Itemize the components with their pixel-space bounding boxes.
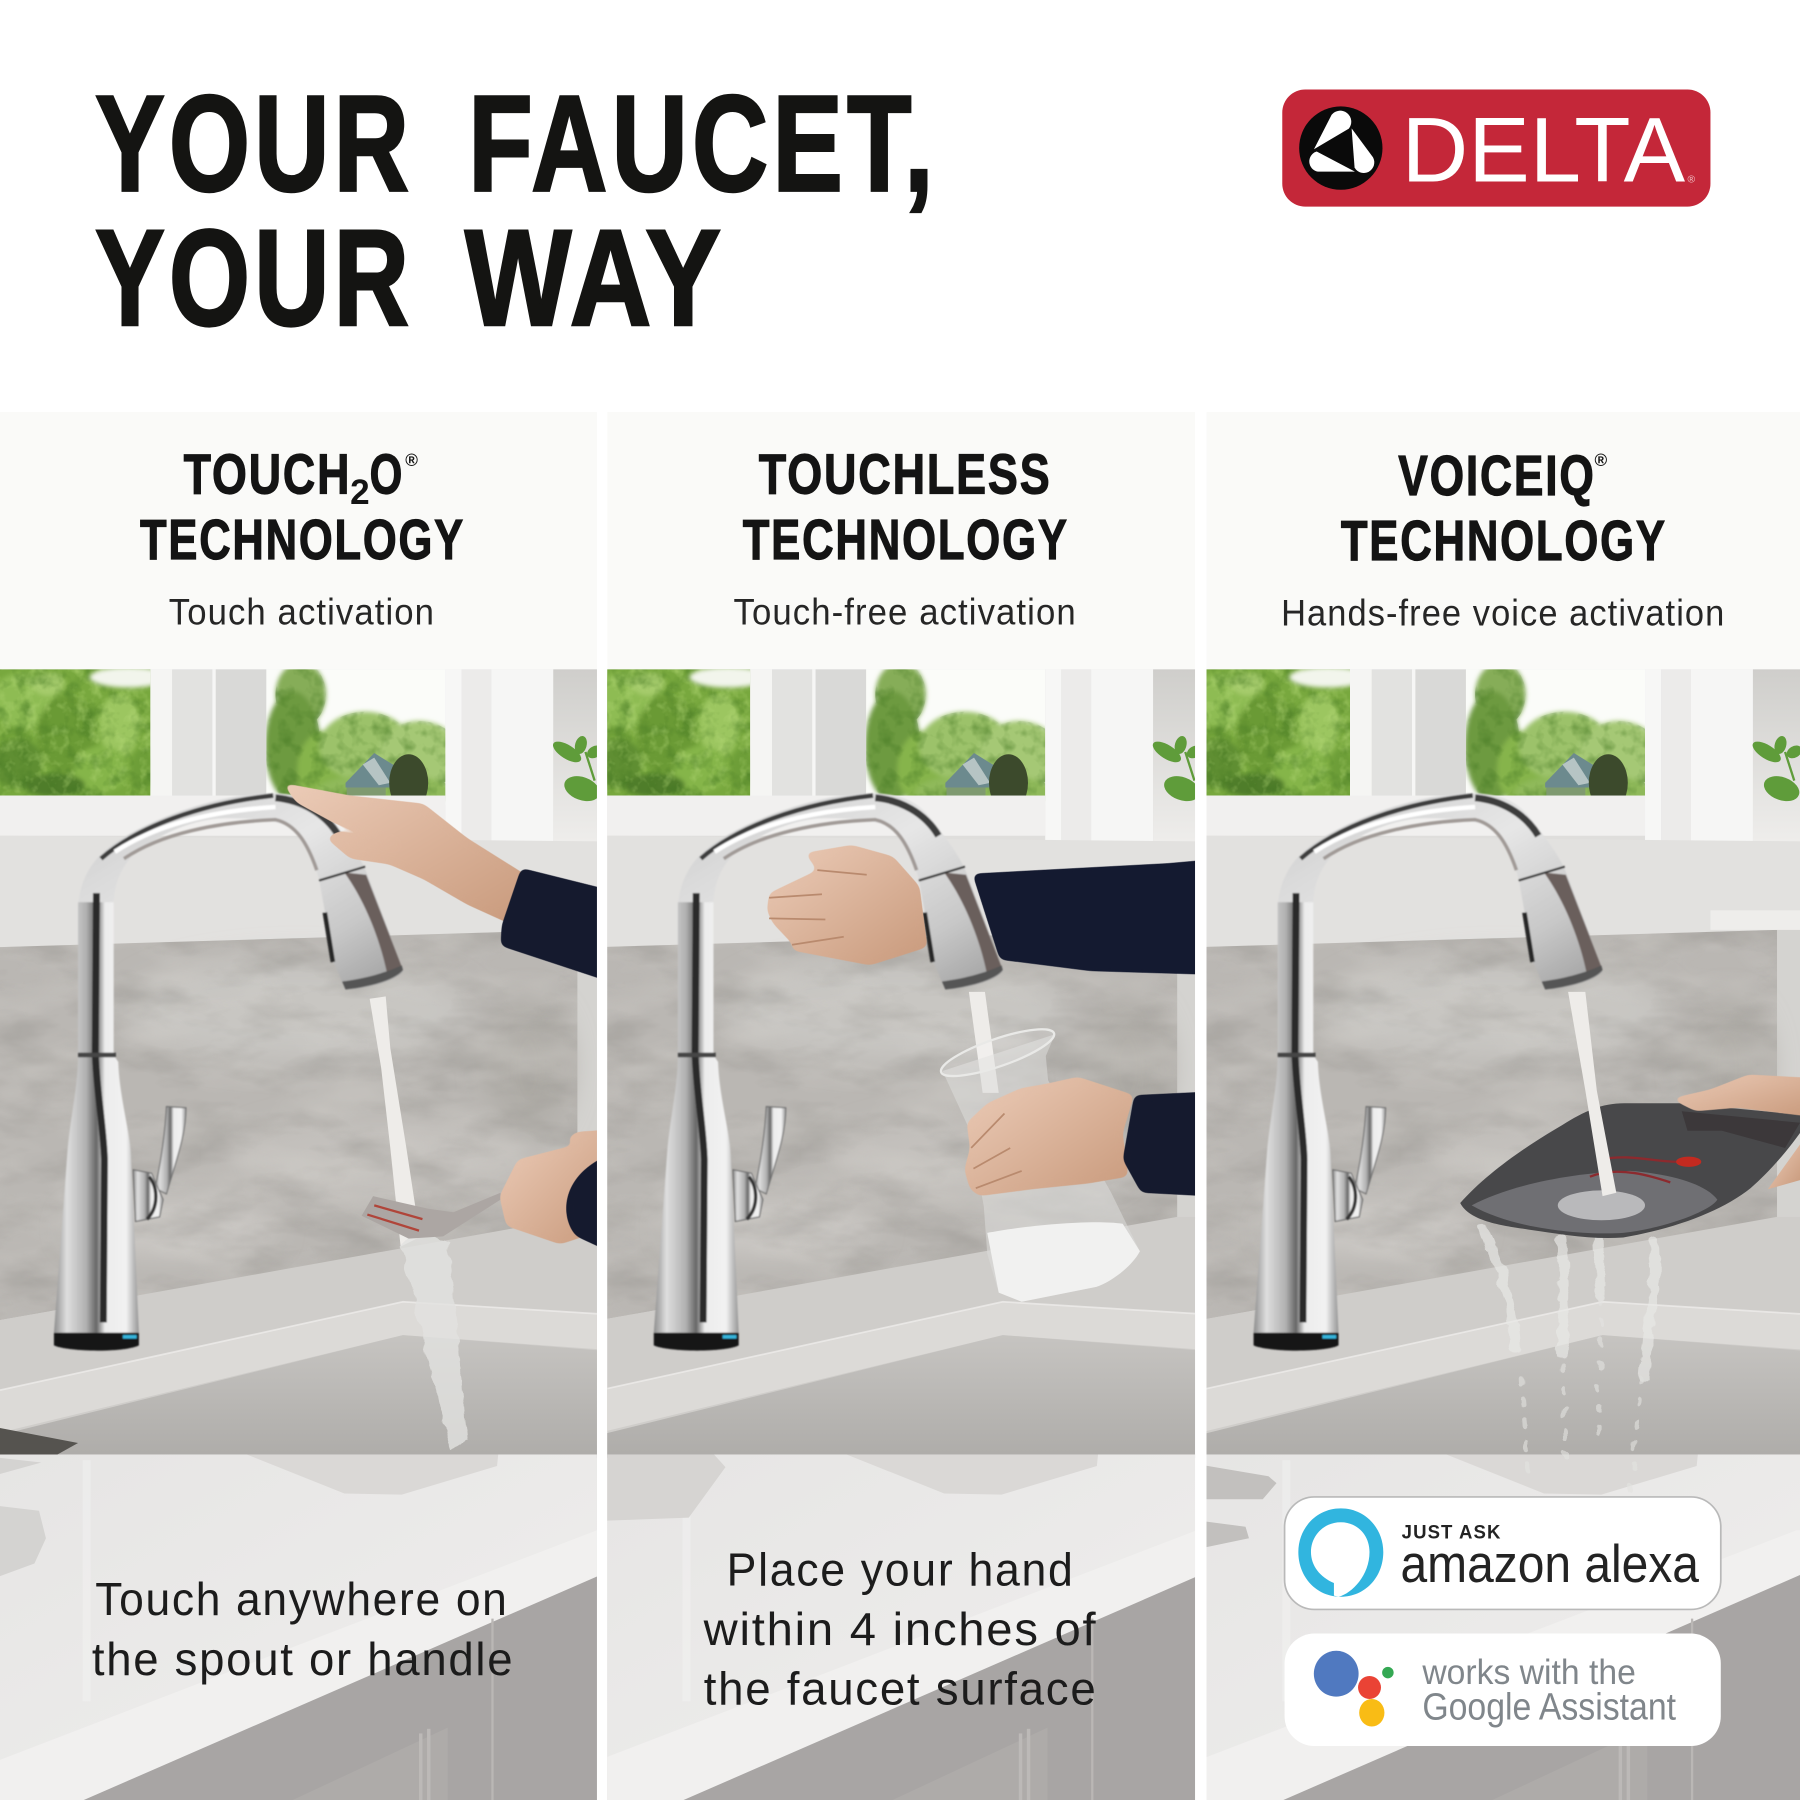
badge: Amazon Alexa: JUST ASK	[1402, 1521, 1502, 1543]
fork	[362, 1193, 501, 1239]
logo: Delta: DELTA	[1402, 99, 1686, 201]
text: touchless instructions: within 4 inches of	[703, 1603, 1097, 1655]
open hand	[767, 845, 928, 965]
text: touchless instructions	[703, 1543, 1097, 1715]
holding hand	[1670, 1074, 1800, 1117]
lower hand	[1768, 1145, 1800, 1189]
heading: VoiceIQ technology: VOICEIQ	[1398, 444, 1596, 507]
heading: VoiceIQ technology: ®	[1595, 450, 1608, 470]
heading: Touch2O technology: O	[370, 443, 404, 506]
window ledge	[1710, 910, 1800, 930]
text: touch instructions: Touch anywhere on	[95, 1573, 509, 1625]
heading: Touchless technology	[743, 443, 1069, 571]
panel: touch photo	[0, 662, 608, 1800]
panel: VoiceIQ header	[1207, 412, 1800, 669]
badge: Amazon Alexa	[1285, 1497, 1721, 1609]
subtitle: Touch activation	[169, 591, 435, 632]
panel: Touchless header	[607, 412, 1195, 669]
icon: Google Assistant dots	[1314, 1651, 1394, 1727]
title: YOUR	[95, 201, 413, 354]
panel: voice photo	[1190, 662, 1800, 1800]
dish under overlay	[597, 1454, 726, 1521]
text: touch instructions: the spout or handle	[92, 1633, 514, 1685]
holding hand	[500, 1130, 597, 1244]
water stream	[969, 992, 999, 1093]
badge: Google Assistant: Google Assistant	[1422, 1687, 1676, 1729]
text: touchless instructions: Place your hand	[727, 1543, 1074, 1595]
plate	[1460, 1103, 1800, 1238]
holding hand	[964, 1077, 1134, 1196]
icon: Alexa ring	[1298, 1508, 1383, 1597]
text: touch instructions	[92, 1573, 514, 1685]
subtitle: Hands-free voice activation	[1281, 593, 1725, 634]
sleeve	[1123, 1092, 1196, 1196]
panel: touchless photo	[591, 662, 1208, 1800]
dishes under overlay	[1206, 1466, 1276, 1547]
sleeve	[566, 1160, 597, 1246]
heading: Touchless technology: TOUCHLESS	[759, 443, 1052, 506]
plate in sink	[0, 1428, 78, 1454]
badge: Google Assistant: works with the	[1421, 1652, 1636, 1692]
heading: Touch2O technology	[140, 443, 465, 571]
heading: Touch2O technology: TECHNOLOGY	[140, 508, 465, 571]
splashing drips	[1483, 1226, 1655, 1492]
title	[95, 67, 938, 354]
heading: VoiceIQ technology: TECHNOLOGY	[1341, 509, 1667, 572]
panel: Touch2O header	[0, 412, 597, 669]
carafe	[937, 1020, 1140, 1302]
badge: Amazon Alexa: amazon alexa	[1401, 1535, 1700, 1594]
water stream	[1568, 992, 1616, 1196]
touching hand	[282, 783, 526, 928]
logo: Delta: ®	[1688, 175, 1696, 186]
badge: Google Assistant	[1285, 1634, 1721, 1746]
heading: VoiceIQ technology	[1341, 444, 1667, 572]
water stream	[370, 996, 419, 1247]
logo: Delta	[1282, 90, 1710, 207]
water foam	[401, 1228, 467, 1451]
heading: Touch2O technology: TOUCH	[184, 443, 351, 506]
heading: Touch2O technology: 2	[350, 472, 370, 512]
sleeve	[972, 860, 1205, 975]
heading: Touchless technology: TECHNOLOGY	[743, 508, 1069, 571]
sleeve	[500, 869, 597, 978]
text: touchless instructions: the faucet surface	[704, 1663, 1097, 1715]
title: YOUR	[95, 67, 413, 220]
subtitle: Touch-free activation	[734, 591, 1077, 632]
dishes under overlay	[0, 1458, 46, 1576]
heading: Touch2O technology: ®	[405, 450, 418, 470]
title: WAY	[465, 201, 726, 354]
title: FAUCET,	[468, 67, 938, 220]
